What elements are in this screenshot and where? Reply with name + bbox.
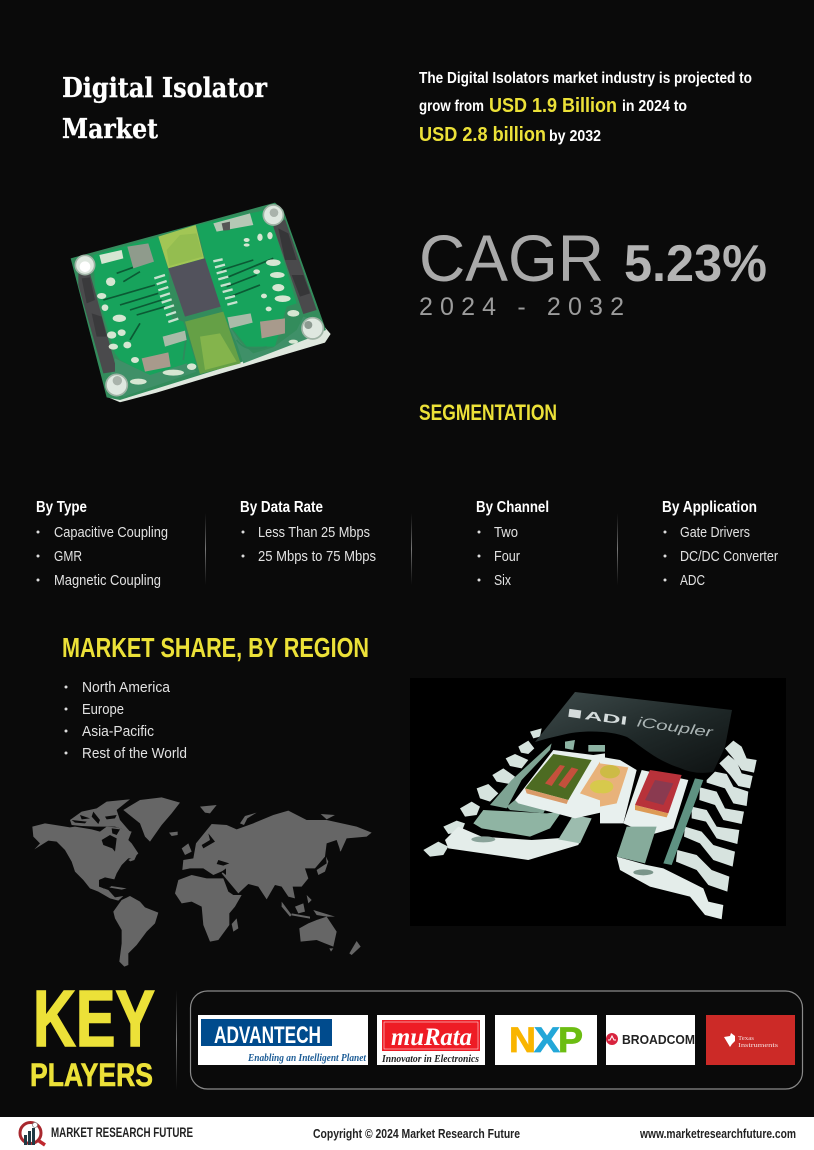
segment: by channel: Two: [494, 524, 518, 541]
market projection text: in 2024 to: [622, 98, 687, 115]
eurasia africa and oceania: [175, 805, 372, 955]
cagr figure: CAGR: [419, 221, 604, 295]
logo: murata: [377, 1015, 485, 1065]
market share heading: MARKET SHARE, BY REGION: [62, 632, 369, 663]
cagr figure: 5.23%: [624, 235, 767, 293]
logo: nxp: [495, 1015, 597, 1065]
segment: by data rate: Less Than 25 Mbps: [258, 524, 370, 541]
market projection text: The Digital Isolators market industry is projected to: [419, 70, 752, 87]
segment: by type: GMR: [54, 548, 82, 565]
key players heading: PLAYERS: [30, 1057, 153, 1093]
title: [62, 73, 268, 145]
green die: [525, 754, 592, 804]
segment: by channel: Six: [494, 572, 511, 589]
segment: by channel: By Channel: [476, 499, 549, 516]
region list: Rest of the World: [82, 745, 187, 762]
market projection text: USD 1.9 Billion: [489, 95, 617, 117]
logo: nxp: X: [534, 1021, 561, 1060]
segment: by application: ADC: [680, 572, 705, 589]
segment: by type: Magnetic Coupling: [54, 572, 161, 589]
cagr figure: [419, 221, 767, 321]
logo: broadcom: BROADCOM: [622, 1032, 695, 1047]
footer: MARKET RESEARCH FUTURE: [51, 1125, 193, 1140]
segment: by application: DC/DC Converter: [680, 548, 778, 565]
world map: [32, 797, 372, 967]
region list: Asia-Pacific: [82, 723, 154, 740]
traces: [103, 258, 273, 360]
logo: advantech: ADVANTECH: [214, 1022, 321, 1049]
market projection text: grow from: [419, 98, 484, 115]
left side of lead frame: [423, 728, 605, 860]
right pins: [676, 741, 757, 892]
logo: nxp: N: [509, 1021, 536, 1060]
segmentation heading: SEGMENTATION: [419, 400, 557, 425]
cagr figure: 2024 - 2032: [419, 293, 624, 321]
header pins: right: [273, 219, 317, 314]
red die: [635, 770, 682, 817]
segment: by type: [36, 499, 168, 589]
market projection text: [419, 70, 752, 146]
logo: texas instruments: Instruments: [738, 1042, 779, 1049]
title: Digital Isolator: [62, 73, 268, 104]
footer: [0, 1117, 814, 1150]
package cap: [535, 692, 732, 773]
segment: by data rate: By Data Rate: [240, 499, 323, 516]
logo: nxp: P: [558, 1021, 583, 1060]
market projection text: USD 2.8 billion: [419, 124, 546, 146]
logo: murata: muRata: [391, 1024, 472, 1051]
orange die: [580, 762, 630, 805]
market projection text: by 2032: [549, 128, 601, 145]
segment: by type: By Type: [36, 499, 87, 516]
package label: ADI: [584, 708, 628, 728]
logo: broadcom: [606, 1015, 695, 1065]
segment: by type: Capacitive Coupling: [54, 524, 168, 541]
region list: Europe: [82, 701, 124, 718]
segment: by application: [662, 499, 778, 589]
key players heading: KEY: [33, 974, 155, 1063]
segment: by application: Gate Drivers: [680, 524, 750, 541]
illustration: circuit board: [71, 203, 331, 402]
logo: texas instruments: Texas: [738, 1035, 754, 1042]
logo: murata: Innovator in Electronics: [381, 1054, 479, 1065]
mounting holes: [75, 205, 323, 396]
region list: North America: [82, 679, 171, 696]
title: Market: [62, 114, 158, 145]
components: [97, 213, 299, 385]
logo: advantech: Enabling an Intelligent Planet: [247, 1052, 367, 1064]
package label: iCoupler: [636, 714, 716, 740]
illustration: ADI iCoupler chip: [410, 678, 786, 926]
olive bottom pad: [185, 312, 241, 374]
americas and greenland: [32, 797, 180, 967]
key players heading: [30, 974, 155, 1093]
right side of lead frame: [593, 741, 757, 919]
footer: Copyright © 2024 Market Research Future: [313, 1126, 520, 1141]
olive top pad: [158, 225, 204, 268]
region list: [64, 679, 187, 762]
segment: by application: By Application: [662, 499, 757, 516]
footer logo icon: [20, 1122, 45, 1145]
package label: [568, 704, 716, 740]
logo: texas instruments: [706, 1015, 795, 1065]
header pins: left: [78, 273, 115, 373]
segment: by channel: Four: [494, 548, 520, 565]
ic chip: [168, 258, 221, 317]
logo: advantech: [198, 1015, 368, 1065]
segment: by channel: [476, 499, 549, 589]
segment: by data rate: [240, 499, 376, 565]
ic legs: [154, 259, 237, 322]
segment: by data rate: 25 Mbps to 75 Mbps: [258, 548, 376, 565]
key players panel: [190, 991, 802, 1089]
